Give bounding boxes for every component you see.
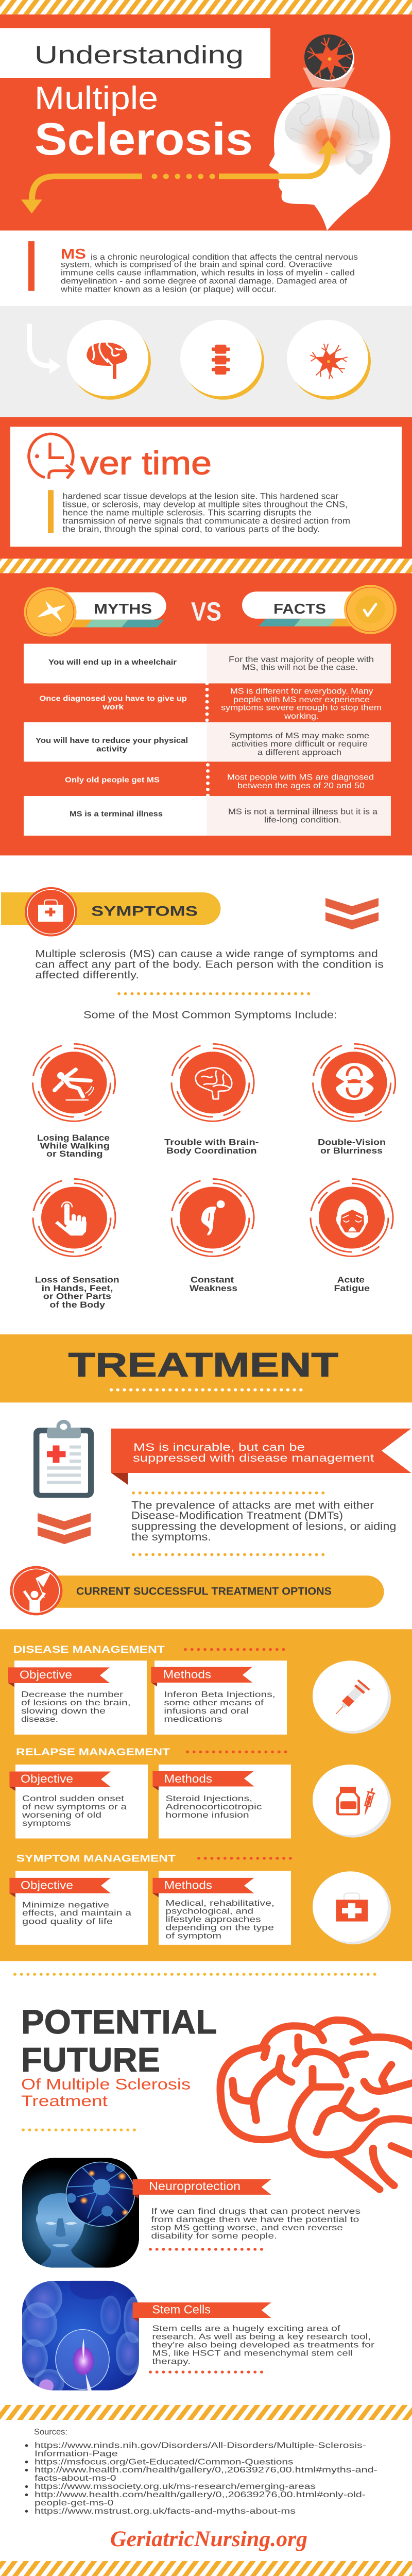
panel: treatment options [0, 1629, 412, 1961]
stripe band [0, 2561, 412, 2576]
symptoms heading [1, 887, 220, 937]
objective card [8, 1660, 147, 1735]
myth 1 [48, 656, 374, 672]
myths badge: MYTHS [94, 601, 152, 617]
myth 5 [70, 808, 377, 824]
methods card [151, 1660, 287, 1735]
myth 1: For the vast majority of people with [229, 656, 374, 664]
icon: syringe [313, 1660, 391, 1734]
icon: brain [67, 320, 151, 400]
icon: clock [29, 434, 73, 479]
treatment text: Disease-Modification Treatment (DMTs) [131, 1509, 343, 1522]
heading: potential future: POTENTIAL [21, 2004, 217, 2041]
icon: medical bag [25, 887, 77, 937]
icon: chevrons [38, 1513, 91, 1544]
top stripe band [0, 0, 412, 14]
myth 2 [39, 687, 382, 721]
title: Multiple: Multiple [35, 80, 158, 116]
myth 5: MS is a terminal illness [70, 810, 163, 818]
facts badge: FACTS [273, 601, 326, 617]
methods card: Steroid Injections, [165, 1794, 252, 1803]
intro text block: system, which is comprised of the brain and spinal cord. Overactive [61, 261, 332, 269]
dotted divider [15, 1973, 376, 1976]
objective card: symptoms [22, 1820, 71, 1828]
head illustration [269, 35, 390, 230]
intro text block: MS [61, 246, 86, 262]
symptom: double vision [313, 1044, 396, 1156]
symptoms intro text: can affect any part of the body. Each person with the condition is [35, 958, 384, 971]
symptom: acute fatigue [311, 1179, 393, 1293]
icon: bottle and syringe [313, 1765, 391, 1838]
icon: neuron [287, 320, 371, 400]
sources: https://www.ninds.nih.gov/Disorders/All-Disorders/Multiple-Sclerosis- [35, 2441, 366, 2450]
treatment text: the symptoms. [131, 1531, 211, 1543]
ribbon: neuroprotection [133, 2179, 271, 2198]
sources: http://www.health.com/health/gallery/0,,20639276,00.html#only-old- [35, 2490, 366, 2499]
symptom: trouble with coordination [164, 1044, 259, 1156]
objective card: effects, and maintain a [22, 1909, 131, 1918]
text: stem cells: MS, like HSCT and mesenchymal stem cell [152, 2349, 353, 2358]
objective card: disease. [21, 1715, 58, 1724]
symptom: acute fatigue: Acute [337, 1275, 365, 1285]
myth 5: life-long condition. [264, 816, 341, 824]
white arrow [29, 324, 61, 374]
methods card: Methods [163, 1668, 211, 1681]
objective card: of lesions on the brain, [21, 1699, 131, 1707]
panel: myths vs facts [0, 573, 412, 855]
disease management [8, 1645, 391, 1735]
text: stem cells: therapy. [152, 2357, 191, 2366]
objective card: Decrease the number [21, 1691, 124, 1699]
symptom: losing balance: Losing Balance [37, 1133, 110, 1143]
myth 1: You will end up in a wheelchair [48, 658, 177, 667]
myths badge [24, 587, 166, 636]
objective card: slowing down the [21, 1707, 106, 1716]
methods card: depending on the type [165, 1924, 274, 1933]
text block: transmission of nerve signals that communicate a desired action from [63, 516, 350, 526]
myth 4: Only old people get MS [65, 776, 160, 784]
text: stem cells: they're also being developed as treatments for [152, 2341, 375, 2349]
methods card: Medical, rehabilitative, [165, 1899, 274, 1908]
methods card: Methods [164, 1878, 212, 1891]
icon: medical bag [313, 1871, 391, 1944]
stripe band [0, 2405, 412, 2420]
text block: tissue, or sclerosis, may develop at multiple sites throughout the CNS, [63, 500, 348, 509]
heading: ver time [80, 445, 212, 481]
text: stem cells: research. As well as being a key research tool, [152, 2332, 371, 2341]
methods card: lifestyle approaches [165, 1916, 261, 1924]
symptom: double vision: Double-Vision [318, 1138, 386, 1147]
heading: potential future: Of Multiple Sclerosis [21, 2076, 191, 2093]
sources: people-get-ms-0 [35, 2498, 113, 2507]
text: neuroprotection [150, 2207, 360, 2249]
objective card: Objective [21, 1772, 73, 1785]
current options heading [10, 1566, 384, 1615]
methods card: medications [164, 1715, 222, 1724]
text: neuroprotection: stop MS getting worse, and even reverse [151, 2223, 343, 2232]
sources: http://www.health.com/health/gallery/0,,20639276,00.html#myths-and- [35, 2466, 377, 2475]
symptom: losing balance [33, 1044, 115, 1159]
VS: VS [191, 598, 221, 626]
symptom: losing balance: or Standing [46, 1149, 103, 1159]
objective card [9, 1765, 148, 1838]
myth 2: MS is different for everybody. Many [230, 687, 373, 696]
heading: potential future [21, 2004, 217, 2130]
methods card: Adrenocorticotropic [165, 1803, 262, 1811]
text block [48, 490, 350, 534]
symptom: trouble with coordination: Body Coordination [166, 1146, 257, 1156]
symptom: loss of sensation: or Other Parts [43, 1292, 111, 1301]
callout ribbon: suppressed with disease management [133, 1452, 374, 1464]
text: stem cells: Stem cells are a hugely exciting area of [152, 2324, 340, 2333]
facts badge [242, 585, 397, 634]
hero panel [0, 14, 412, 230]
objective card: Objective [21, 1878, 73, 1891]
treatment text [131, 1493, 396, 1555]
methods card [152, 1871, 291, 1945]
ribbon: stem cells [133, 2302, 271, 2322]
relapse management [9, 1747, 391, 1838]
relapse management: RELAPSE MANAGEMENT [16, 1747, 170, 1758]
intro text block: is a chronic neurological condition that affects the central nervous [91, 253, 358, 262]
callout ribbon: MS is incurable, but can be [133, 1441, 305, 1453]
sources: https://msfocus.org/Get-Educated/Common-Questions [35, 2458, 293, 2466]
myth 2: work [102, 703, 124, 711]
methods card: Methods [164, 1772, 212, 1785]
symptom management: SYMPTOM MANAGEMENT [16, 1853, 176, 1864]
title: Sclerosis: Sclerosis [35, 114, 253, 165]
heading: potential future: FUTURE [21, 2042, 160, 2079]
logo: GeriatricNursing.org: GeriatricNursing.org [110, 2526, 307, 2551]
symptoms intro text [35, 947, 384, 994]
objective card: worsening of old [22, 1811, 101, 1820]
myth 2: working. [284, 712, 319, 721]
symptom: losing balance: While Walking [40, 1141, 110, 1150]
text block: hence the name multiple sclerosis. This scarring disrupts the [63, 508, 312, 517]
intro text block: demyelination - and some degree of axonal damage. Damaged area of [61, 277, 348, 286]
heading: potential future: Treatment [21, 2092, 108, 2110]
myth 4: Most people with MS are diagnosed [227, 773, 374, 782]
treatment text: suppressing the development of lesions, or aiding [131, 1520, 396, 1532]
objective card: Objective [20, 1668, 72, 1681]
symptom: loss of sensation: of the Body [49, 1300, 106, 1310]
symptom management [9, 1853, 391, 1945]
icon: clipboard [33, 1420, 94, 1498]
symptoms heading: SYMPTOMS [91, 903, 198, 919]
table rows [24, 644, 391, 836]
symptoms intro text: affected differently. [35, 969, 139, 981]
myth 4 [65, 773, 374, 790]
disease management: DISEASE MANAGEMENT [13, 1645, 165, 1655]
myth 1: MS, this will not be the case. [242, 664, 358, 672]
symptom: acute fatigue: Fatigue [334, 1283, 370, 1293]
treatment banner: TREATMENT [68, 1347, 338, 1384]
methods card: infusions and oral [164, 1707, 249, 1716]
photo: stem cells [22, 2280, 139, 2391]
icon: spine [180, 320, 264, 400]
symptom: constant weakness: Constant [191, 1275, 234, 1285]
myth 2: people with MS never experience [233, 696, 370, 704]
yellow arrow to brain [154, 140, 338, 176]
intro text block [28, 241, 358, 294]
myth 3: activities more difficult or require [231, 740, 368, 749]
sources: https://www.mstrust.org.uk/facts-and-myths-about-ms [35, 2506, 296, 2516]
icon: person with flag [10, 1566, 62, 1615]
methods card: hormone infusion [165, 1811, 249, 1820]
myth 3: a different approach [258, 749, 341, 757]
objective card: Control sudden onset [22, 1794, 125, 1803]
methods card: some other means of [164, 1699, 264, 1707]
text: neuroprotection: from damage then we have the potential to [151, 2215, 359, 2224]
text: neuroprotection: disability for some people. [151, 2231, 277, 2241]
title box: Understanding [35, 40, 244, 69]
text block: hardened scar tissue develops at the lesion site. This hardened scar [63, 492, 338, 501]
sources: https://www.mssociety.org.uk/ms-research/emerging-areas [35, 2482, 316, 2491]
stripe band [0, 558, 412, 573]
methods card: of symptom [165, 1932, 221, 1940]
myth 5: MS is not a terminal illness but it is a [228, 808, 377, 816]
text block: the brain, through the spinal cord, to various parts of the body. [63, 524, 320, 534]
intro text block: immune cells cause inflammation, which results in loss of myelin - called [61, 269, 355, 278]
symptom: loss of sensation: in Hands, Feet, [42, 1283, 113, 1293]
symptom: double vision: or Blurriness [320, 1146, 383, 1156]
ribbon: stem cells: Stem Cells [152, 2303, 211, 2316]
intro text block: white matter known as a lesion (or plaque) will occur. [60, 285, 277, 294]
objective card: Minimize negative [22, 1901, 109, 1909]
treatment banner [0, 1334, 412, 1402]
common symptoms subheading: Some of the Most Common Symptoms Include: [83, 1009, 337, 1021]
objective card [9, 1871, 148, 1945]
myth 3: You will have to reduce your physical [36, 737, 188, 745]
symptom: trouble with coordination: Trouble with Brain- [164, 1138, 259, 1147]
objective card: of new symptoms or a [22, 1803, 127, 1811]
methods card: Inferon Beta Injections, [164, 1691, 276, 1699]
myth 3: Symptoms of MS may make some [229, 732, 369, 740]
photo: head with neurons [22, 2158, 139, 2268]
myth 2: symptoms severe enough to stop them [221, 704, 382, 712]
title box [0, 28, 270, 78]
symptom: constant weakness: Weakness [190, 1283, 237, 1293]
sources: Sources: [34, 2427, 67, 2436]
myth 3 [36, 732, 369, 757]
myth 2: Once diagnosed you have to give up [39, 694, 187, 703]
icon: large brain outline [220, 2020, 412, 2190]
sources [25, 2427, 377, 2516]
ribbon: neuroprotection: Neuroprotection [149, 2180, 241, 2193]
myth 3: activity [96, 745, 127, 753]
text: stem cells [150, 2324, 375, 2372]
myth 4: between the ages of 20 and 50 [237, 782, 365, 790]
text: neuroprotection: If we can find drugs that can protect nerves [151, 2207, 360, 2216]
sources: Information-Page [35, 2449, 118, 2458]
current options heading: CURRENT SUCCESSFUL TREATMENT OPTIONS [76, 1585, 332, 1598]
panel: over time [0, 417, 412, 558]
symptom: loss of sensation: Loss of Sensation [35, 1275, 119, 1285]
objective card: good quality of life [22, 1918, 113, 1926]
icon: chevrons [325, 898, 379, 929]
callout ribbon [111, 1429, 411, 1485]
methods card: psychological, and [165, 1907, 253, 1916]
methods card [152, 1765, 291, 1838]
symptom: loss of sensation [33, 1179, 119, 1310]
treatment text: The prevalence of attacks are met with either [131, 1499, 374, 1511]
sources: facts-about-ms-0 [35, 2474, 116, 2483]
panel: CNS icons [0, 306, 412, 417]
symptom: constant weakness [171, 1179, 254, 1293]
yellow arrow to text [21, 176, 142, 214]
symptoms intro text: Multiple sclerosis (MS) can cause a wide range of symptoms and [35, 947, 378, 960]
